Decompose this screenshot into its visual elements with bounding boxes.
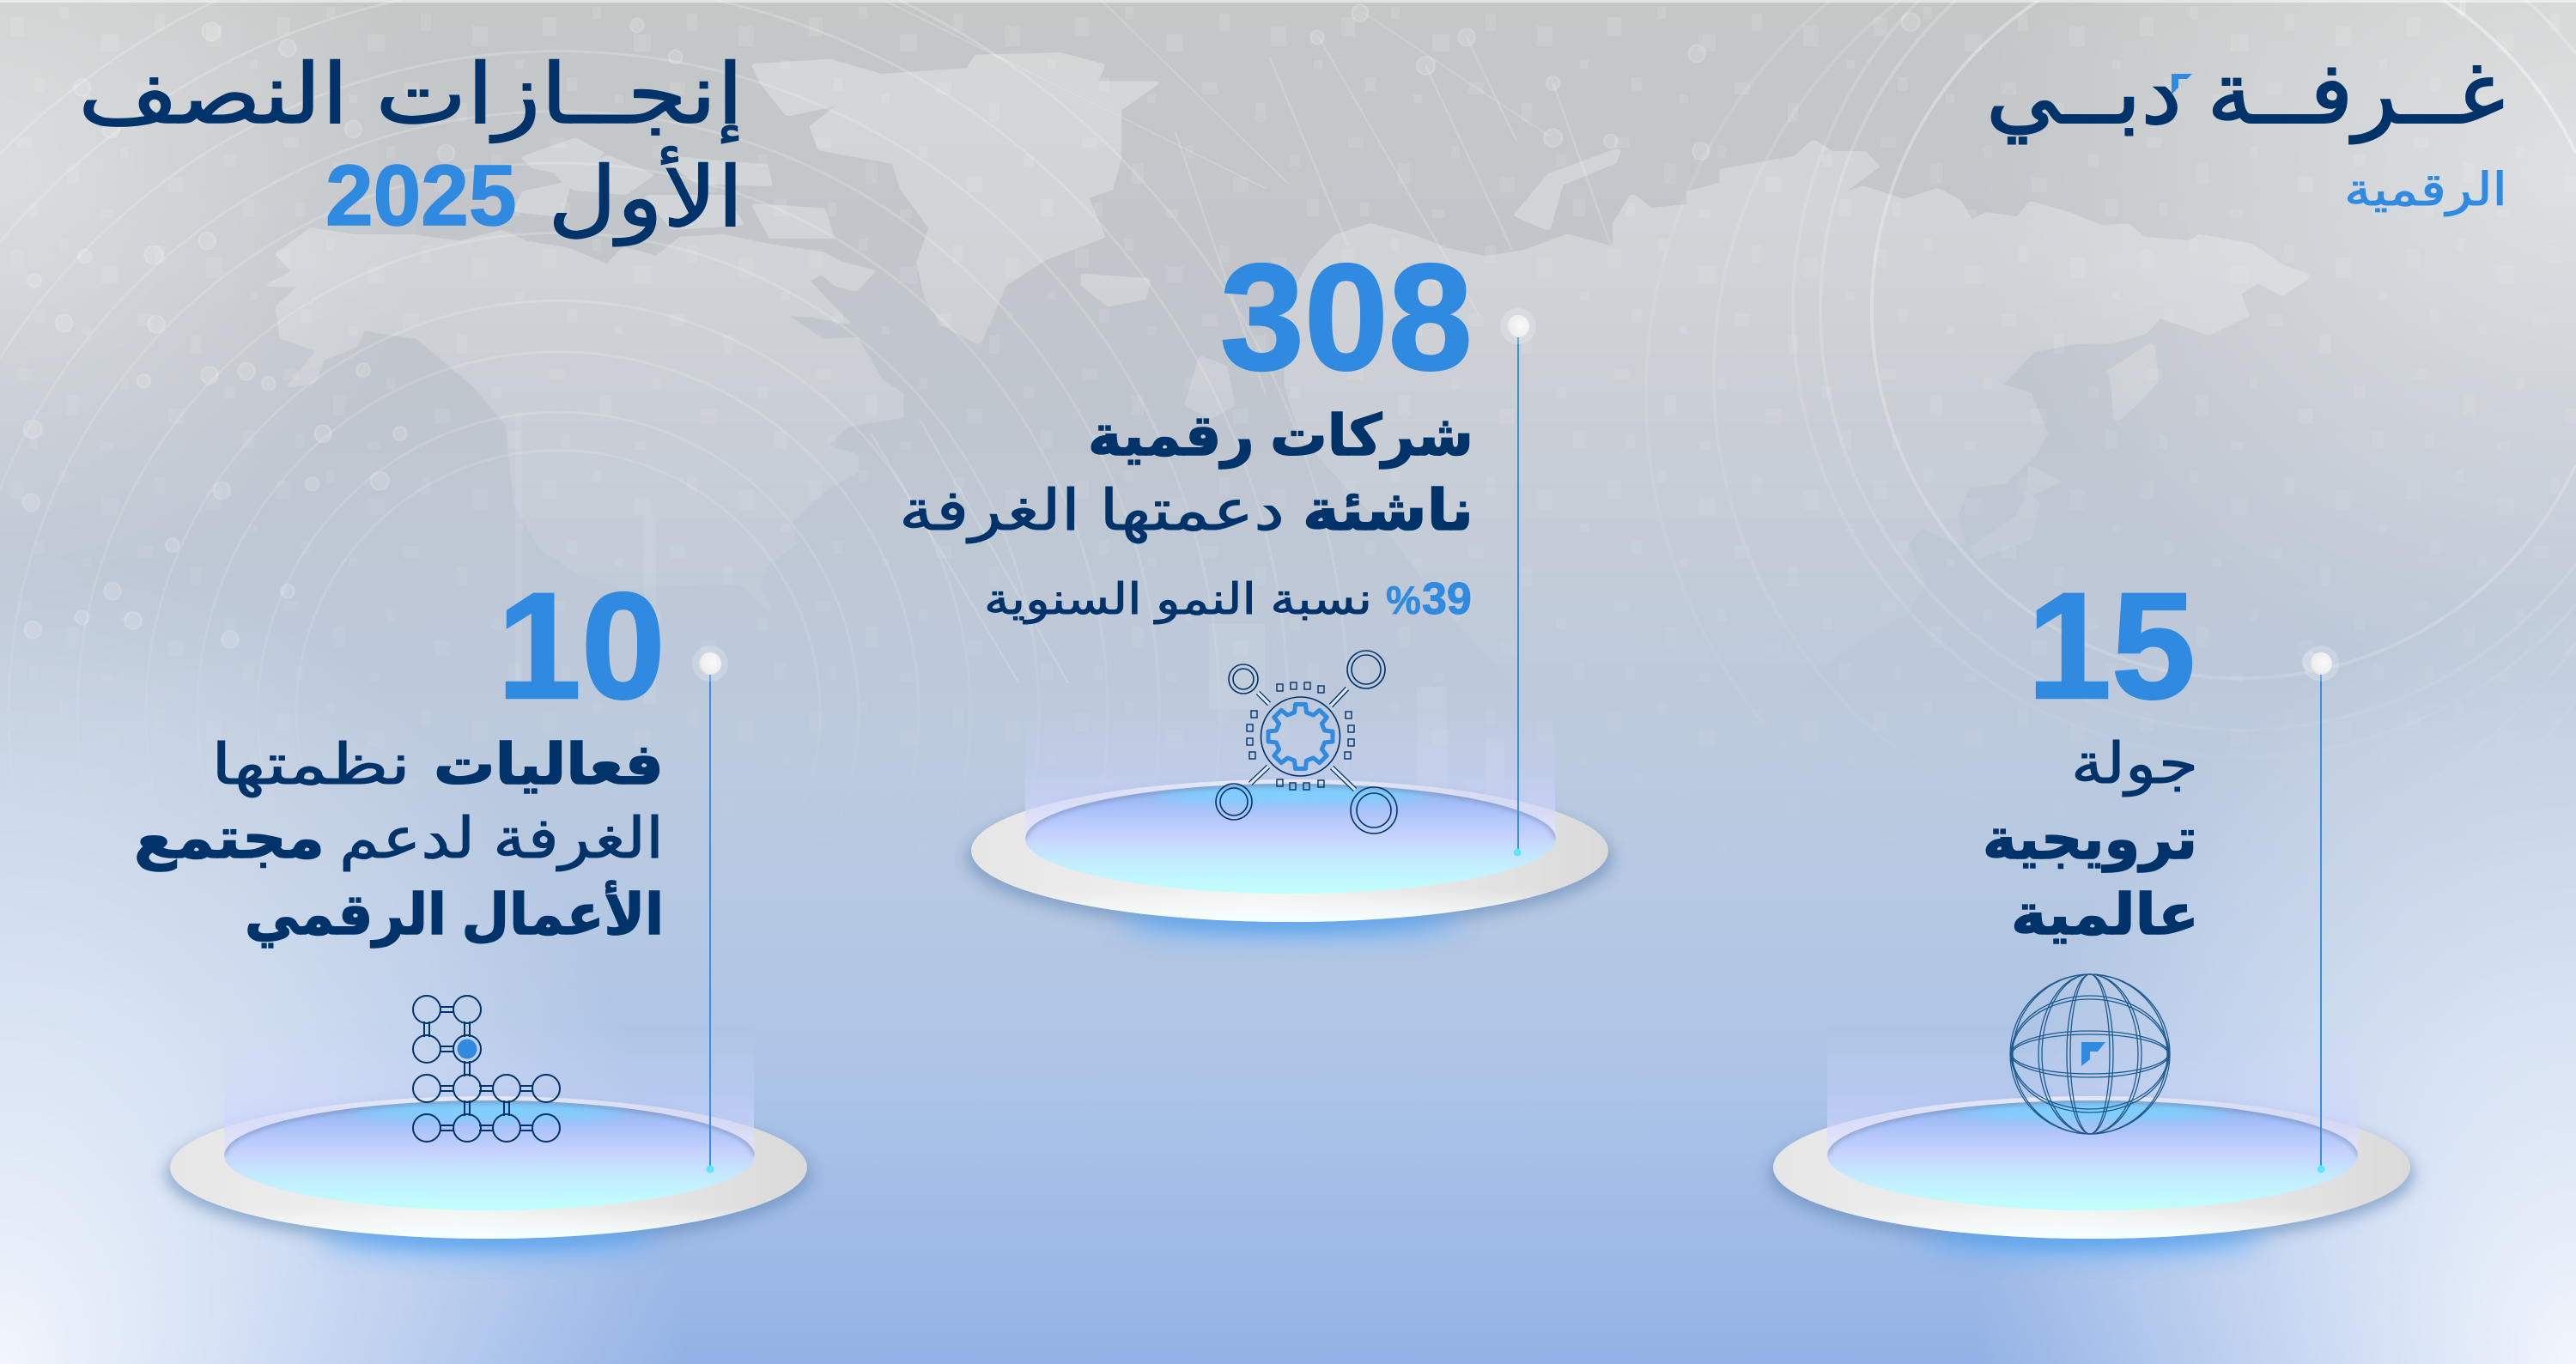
logo subtitle: digital: الرقمية (2344, 165, 2507, 216)
map: greenland (813, 55, 1155, 342)
orbit rings left (136, 3, 1307, 536)
growth percent: % (1386, 578, 1421, 622)
title (78, 47, 744, 246)
platform: right (1769, 1026, 2415, 1252)
map: novaya zemlya (1518, 151, 1617, 227)
icon: globe (2010, 974, 2170, 1134)
world map (267, 53, 2312, 454)
platform: center (967, 709, 1613, 935)
number 308: 308 (1220, 233, 1473, 402)
digital bars glow (515, 412, 1504, 841)
line: promotional bold: ترويجية (1983, 807, 2197, 873)
line: startup bold: ناشئة (1303, 478, 1473, 542)
icon: gear network (1216, 651, 1397, 834)
map: eurasia (1285, 141, 2312, 454)
growth number: 39 (1422, 574, 1472, 624)
map: iceland (1084, 276, 1146, 305)
stat: 10 events (134, 562, 665, 948)
logo accent (2172, 74, 2192, 94)
network nodes and rays (23, 0, 2465, 683)
map: uk (1189, 361, 1230, 415)
map: north america (267, 228, 903, 454)
map: arctic islands (518, 140, 830, 237)
line: tour: جولة (2071, 731, 2198, 797)
digital square texture (0, 0, 2576, 944)
icon: node network (413, 996, 560, 1142)
line: chamber support: الغرفة لدعم (339, 806, 664, 871)
line: digital companies: شركات رقمية (1088, 403, 1473, 469)
line: supported by chamber: دعمتها الغرفة (899, 478, 1285, 543)
pin: center (1500, 308, 1536, 857)
line: community bold: مجتمع (134, 806, 325, 871)
stat: 15 tours (1983, 562, 2199, 946)
map: arctic island (756, 61, 875, 114)
line: organised: نظمتها (211, 732, 410, 797)
title year: 2025 (325, 148, 516, 244)
map: kamchatka (2110, 346, 2155, 418)
line: global bold: عالمية (2011, 882, 2199, 946)
orbit rings right (1832, 0, 2576, 680)
logo wordmark: غــرفــة دبــي (1986, 45, 2505, 144)
title line 1: إنجــازات النصف (78, 47, 744, 143)
stat: 308 startups (899, 233, 1473, 624)
globe emblem (2081, 1042, 2105, 1066)
number 10: 10 (497, 562, 665, 730)
number 15: 15 (2027, 562, 2196, 730)
pin: left (692, 646, 728, 1173)
logo: Dubai Chamber (1986, 45, 2505, 144)
line: events bold: فعاليات (434, 732, 664, 796)
title line 2: الأول (548, 146, 744, 246)
map: japan (1974, 469, 2057, 556)
growth label: نسبة النمو السنوية (984, 575, 1372, 624)
line: digital business bold: الأعمال الرقمي (245, 880, 664, 948)
platform: left (166, 1026, 811, 1252)
pin: right (2303, 646, 2339, 1173)
